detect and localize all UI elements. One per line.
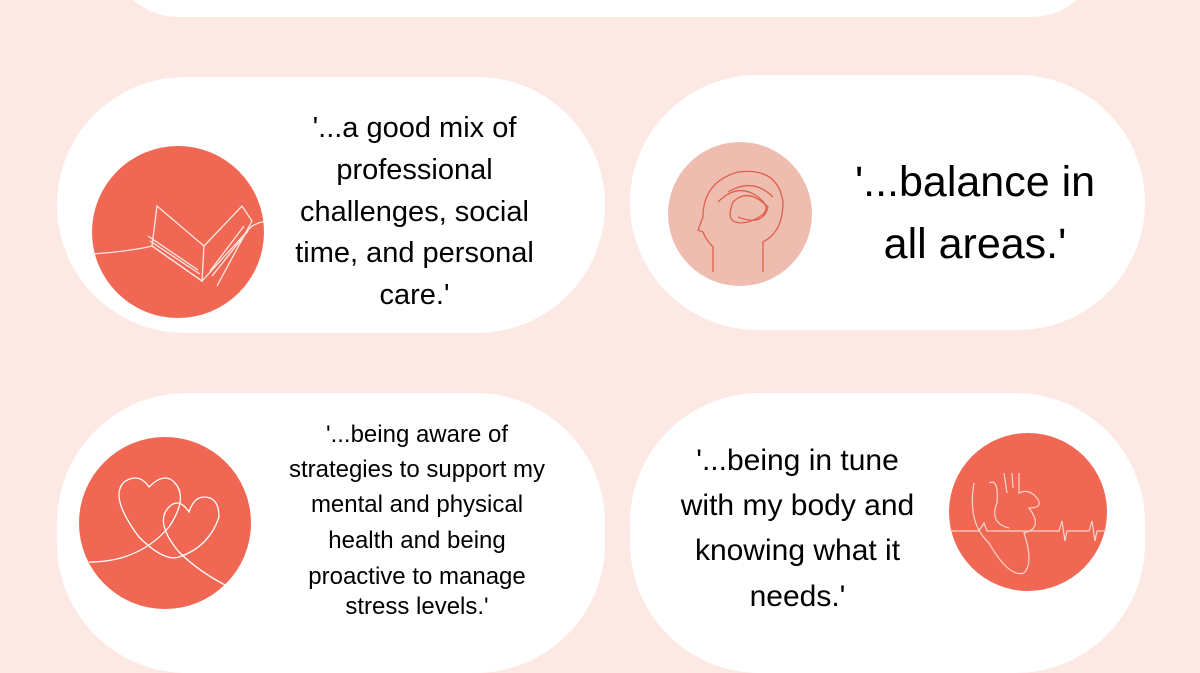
text: strategies to support my (289, 456, 545, 483)
text: proactive to manage (308, 563, 526, 590)
icon: book (92, 146, 264, 318)
text: care.' (379, 279, 450, 311)
text: '...balance in (855, 158, 1095, 206)
text: '...being aware of (326, 421, 508, 448)
text (855, 158, 1095, 268)
text: professional (336, 154, 493, 186)
panel: in tune (630, 393, 1145, 673)
text (289, 421, 545, 620)
text: needs.' (750, 580, 845, 613)
icon: hearts (79, 437, 251, 609)
panel: balance (630, 75, 1145, 330)
panel: being aware (57, 393, 605, 673)
icon: brain (668, 142, 812, 286)
text: knowing what it (695, 534, 900, 567)
text: '...being in tune (696, 444, 899, 477)
text: '...a good mix of (313, 112, 516, 144)
top pill (partial) (110, 0, 1100, 17)
panel: good mix (57, 77, 605, 333)
text (680, 444, 914, 613)
text: time, and personal (295, 237, 534, 269)
icon: heart with pulse (949, 433, 1107, 591)
text: stress levels.' (345, 593, 489, 620)
text (295, 112, 534, 311)
text: health and being (328, 527, 506, 554)
text: mental and physical (311, 491, 523, 518)
text: challenges, social (300, 196, 529, 228)
text: all areas.' (884, 220, 1066, 268)
text: with my body and (681, 489, 914, 522)
